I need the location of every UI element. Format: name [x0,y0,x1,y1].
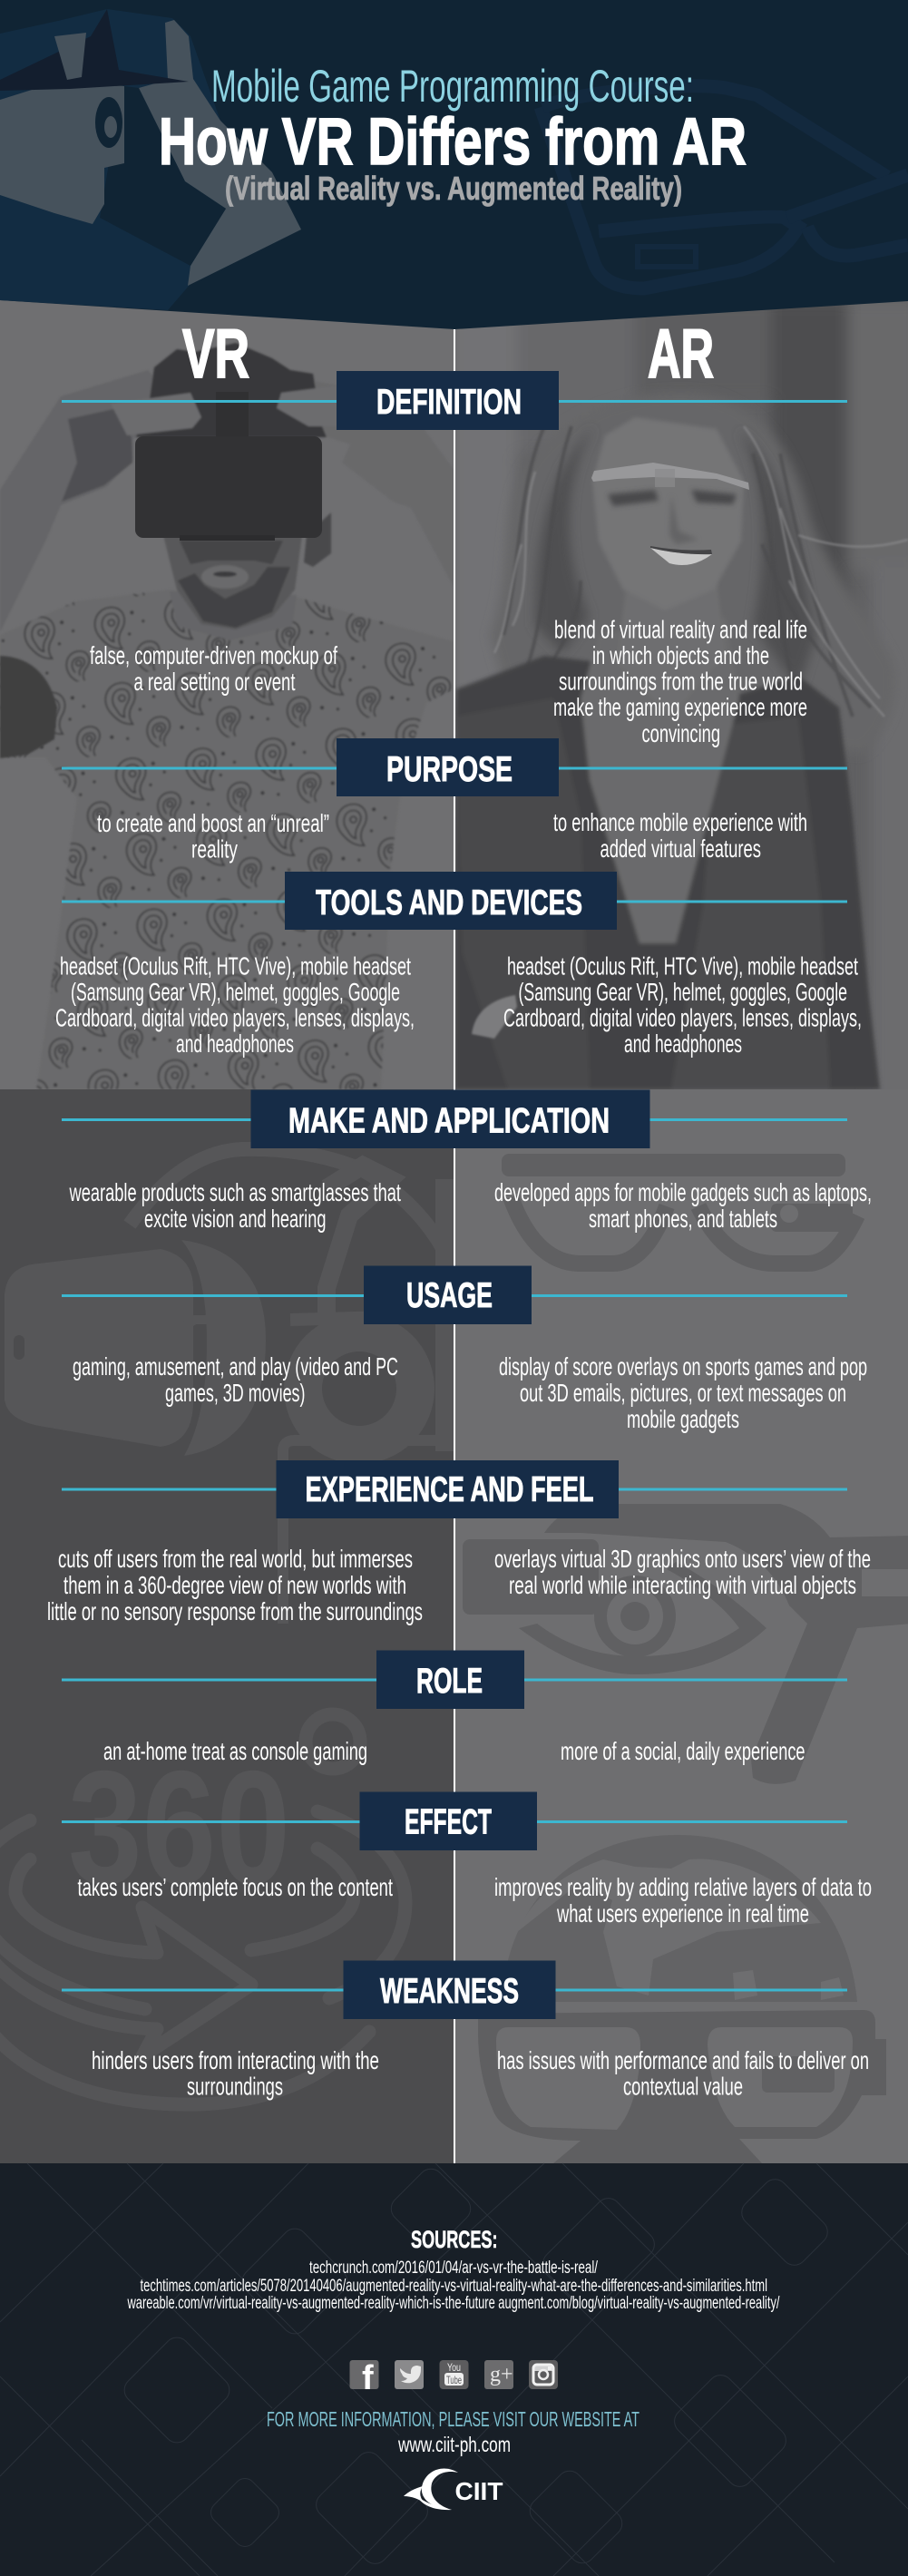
illustration: man with VR headset silhouette [0,9,301,310]
section heading: make and application: MAKE AND APPLICATION [288,1101,610,1141]
photo: dark foreground forearm [0,656,57,758]
icon: twitter [395,2360,424,2389]
footer line pattern [0,2163,908,2576]
photo: facial features [608,490,737,565]
title line 2: How VR Differs from AR [159,105,747,179]
photo: palm shadow [62,408,132,502]
title block [159,61,747,207]
text: VR make: wearable products such as smartglasses that [69,1178,401,1206]
icon: eye and AR glasses watermark [463,1504,908,1784]
icon: headphones and lens watermark [130,1149,454,1624]
text: VR effect: takes users’ complete focus on the content [78,1873,393,1901]
logo: CIIT [404,2469,503,2510]
photo: man's figure [0,343,454,1089]
text: VR experience: cuts off users from the real world, but immerses [58,1545,413,1573]
section heading: experience and feel: EXPERIENCE AND FEEL [305,1470,593,1509]
section heading: weakness: WEAKNESS [380,1972,519,2011]
section heading: effect [62,1792,847,1850]
photo: jacket, chest and neck [455,581,880,1089]
photo: shirt with paisley print [0,590,454,1089]
text: VR usage: games, 3D movies) [165,1379,305,1407]
panel: VR photo of man wearing headset [0,299,454,1089]
icon: facebook [350,2359,379,2397]
section heading: usage [62,1266,847,1324]
text: AR weakness [497,2046,869,2101]
photo: VR headset [135,392,322,541]
icon: 360 degree watermark [0,1714,405,2104]
section heading: tools and devices: TOOLS AND DEVICES [316,883,582,922]
social icons row [350,2359,558,2397]
text: VR usage [73,1352,398,1407]
text: AR usage [499,1352,867,1433]
text: AR definition: in which objects and the [592,641,769,669]
icon: youtube: Tube [446,2374,462,2386]
icon: VR headset watermark [5,1240,266,1456]
text: AR weakness: contextual value [623,2072,743,2101]
icon: google plus [484,2360,513,2389]
section heading: role [62,1651,847,1709]
text: VR tools: Cardboard, digital video players, lenses, displays, [55,1003,415,1032]
text: VR purpose: to create and boost an “unreal” [97,809,329,837]
section heading: tools and devices [62,872,847,930]
sources list: techcrunch.com/2016/01/04/ar-vs-vr-the-battle-is-real/ [309,2259,598,2278]
photo: face [593,417,744,590]
text: VR tools: and headphones [176,1029,294,1058]
photo: smart glasses frame [591,463,749,490]
section heading: usage: USAGE [406,1276,493,1315]
subtitle: (Virtual Reality vs. Augmented Reality) [225,170,682,207]
section heading: effect: EFFECT [405,1803,492,1841]
header: dark title band with chevron edge [0,0,908,329]
sources list [127,2259,780,2313]
text: VR make [69,1178,401,1233]
column heading: VR: VR [182,316,249,393]
section heading: weakness [62,1961,847,2019]
text: VR purpose: reality [191,834,238,864]
text: VR experience: them in a 360-degree view of new worlds with [63,1571,406,1599]
photo: neck [171,596,294,640]
text: AR effect [494,1873,872,1927]
text: VR tools: headset (Oculus Rift, HTC Vive), mobile headset [60,952,411,980]
icon: youtube [439,2360,468,2389]
icon: smart glasses watermark [502,1154,857,1264]
text: VR weakness: hinders users from interacting with the [92,2046,379,2074]
text: VR role: an at-home treat as console gaming [103,1737,367,1765]
icon: globe and glasses watermark [478,1835,886,2163]
panel: lower right AR column [455,1089,908,2163]
text: VR tools [55,952,415,1058]
text: AR tools: and headphones [624,1029,742,1058]
photo: man's hair [136,343,327,437]
section heading: make and application [62,1090,847,1148]
text: VR definition [90,641,337,696]
text: VR definition: a real setting or event [134,668,296,696]
icon: instagram [529,2360,558,2389]
icon: facebook: f [362,2359,374,2397]
call to action text: FOR MORE INFORMATION, PLEASE VISIT OUR WEBSITE AT [267,2407,640,2431]
text: AR purpose [553,808,807,863]
text: VR definition: false, computer-driven mockup of [90,641,337,669]
website address: www.ciit-ph.com [397,2433,511,2456]
text: VR purpose [97,809,329,864]
column heading: AR: AR [648,316,714,393]
photo: blurred street background [449,299,908,1107]
text: VR weakness [92,2046,379,2101]
text: AR experience [494,1545,871,1599]
text: VR make: excite vision and hearing [144,1205,327,1233]
text: AR purpose: added virtual features [600,834,761,863]
sources heading: SOURCES: [411,2226,497,2253]
icon: youtube: You [447,2361,461,2374]
text: AR usage: mobile gadgets [627,1405,739,1433]
text: VR weakness: surroundings [187,2072,283,2101]
photo: man's left arm and hand [1,372,151,627]
icon: google plus: g+ [490,2363,513,2386]
section heading: definition [62,371,847,430]
section heading: definition: DEFINITION [376,383,522,422]
photo: fingers over hair [113,387,323,435]
panel: lower left VR column [0,1089,454,2163]
text: VR experience [47,1545,423,1625]
text: VR experience: little or no sensory response from the surroundings [47,1597,423,1625]
section heading: purpose [62,738,847,796]
text: AR tools [503,952,862,1058]
footer background [0,2163,908,2576]
section heading: experience and feel [62,1460,847,1518]
illustration: AR glasses outline [541,86,908,288]
panel: AR photo of woman wearing smart glasses [449,299,908,1107]
text: VR tools: (Samsung Gear VR), helmet, goggles, Google [71,978,400,1006]
text: AR make: smart phones, and tablets [589,1205,777,1233]
logo: CIIT: CIIT [455,2477,503,2505]
section heading: purpose: PURPOSE [386,750,513,789]
text: VR usage: gaming, amusement, and play (video and PC [73,1352,398,1381]
section heading: role: ROLE [416,1662,483,1701]
text: AR definition: convincing [642,719,720,747]
photo: man's right arm and hand [315,381,454,587]
text: AR make [494,1178,872,1233]
text: AR definition [553,615,807,747]
photo: hand in pocket [472,995,517,1039]
icon: 360 degree watermark: 360 [68,1737,290,1917]
photo: face and beard [163,512,331,629]
photo: woman's hair [493,414,908,717]
divider line between VR and AR [454,329,455,2163]
